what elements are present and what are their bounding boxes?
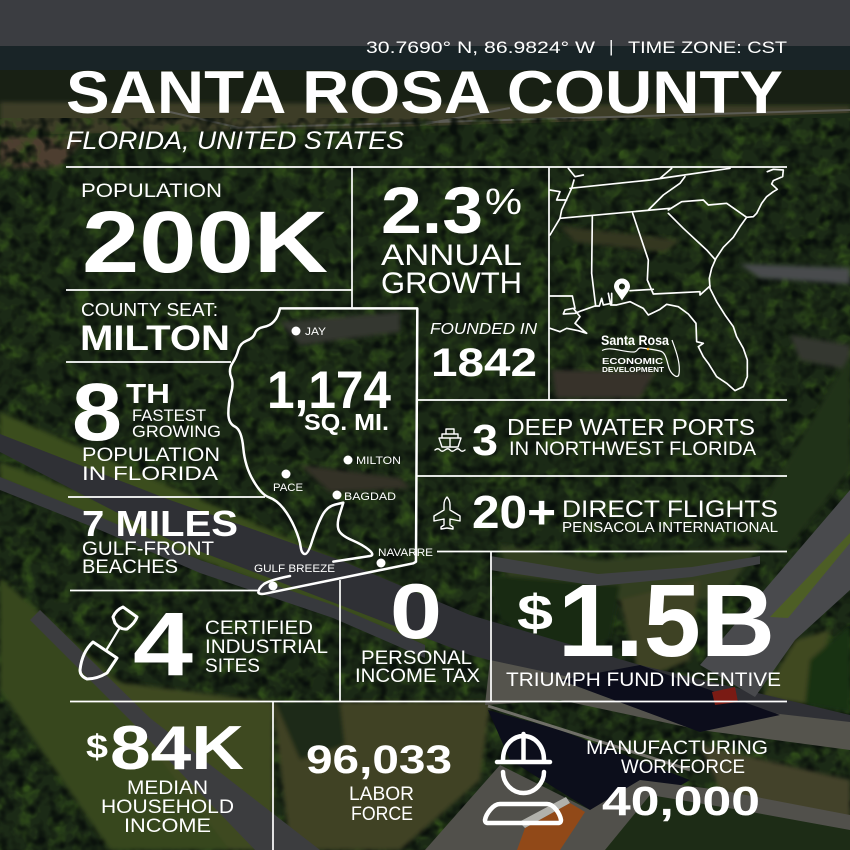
founded stat: 1842 (431, 341, 537, 385)
icon: ship (435, 429, 465, 451)
manufacturing workforce stat: WORKFORCE (621, 757, 745, 778)
clearings (280, 312, 400, 345)
founded stat: FOUNDED IN (430, 321, 537, 338)
clearing at left (0, 136, 85, 168)
lower-left road (30, 610, 320, 850)
county outline (228, 308, 417, 594)
income tax stat: PERSONAL (361, 648, 472, 669)
city markers: NAVARRE (378, 547, 433, 559)
median income stat: HOUSEHOLD (101, 797, 234, 818)
county seat: MILTON (80, 319, 230, 358)
sky and horizon (0, 0, 850, 46)
Santa Rosa logo (601, 332, 679, 376)
underpass shadow (560, 665, 780, 732)
side ramp (490, 556, 760, 586)
population stat: 200K (82, 194, 328, 291)
beaches stat (82, 503, 238, 578)
Santa Rosa logo: ECONOMIC (602, 356, 663, 366)
ports stat: IN NORTHWEST FLORIDA (509, 439, 756, 460)
overpass deck (485, 660, 850, 750)
city markers: MILTON (356, 455, 401, 467)
county seat: COUNTY SEAT: (81, 300, 218, 320)
subtitle: FLORIDA, UNITED STATES (66, 127, 404, 155)
beaches stat: BEACHES (82, 557, 178, 578)
beaches stat: GULF-FRONT (82, 539, 214, 560)
manufacturing workforce stat: 40,000 (602, 778, 760, 824)
fastest growing stat: GROWING (132, 422, 221, 441)
population stat: POPULATION (81, 181, 222, 202)
annual growth stat: 2.3 (381, 173, 483, 247)
ports stat: DEEP WATER PORTS (507, 414, 755, 440)
manufacturing workforce stat (485, 734, 768, 824)
flights stat: PENSACOLA INTERNATIONAL (562, 519, 778, 536)
icon: shovel (80, 607, 137, 679)
county seat (80, 300, 230, 358)
triumph fund stat: $ (517, 585, 553, 641)
income tax stat (355, 567, 480, 687)
median income stat: $ (86, 728, 108, 765)
city markers (254, 326, 433, 590)
city markers: GULF BREEZE (254, 563, 335, 575)
left verges (0, 412, 430, 615)
right verges (745, 355, 850, 552)
labor force stat: FORCE (351, 804, 413, 825)
median income stat: MEDIAN (127, 778, 208, 799)
fastest growing stat: 8 (72, 367, 122, 458)
labor force stat: 96,033 (306, 738, 452, 782)
industrial sites stat (80, 595, 328, 695)
coordinates: 30.7690° N, 86.9824° W (366, 38, 595, 57)
header (66, 37, 787, 155)
red truck cab (712, 687, 738, 705)
annual growth stat: GROWTH (381, 267, 522, 300)
annual growth stat: % (485, 181, 522, 222)
annual growth stat (381, 173, 522, 300)
area figure: 1,174 (267, 361, 391, 420)
manufacturing workforce stat: MANUFACTURING (586, 738, 768, 759)
separator: | (609, 37, 613, 56)
flights stat: 20+ (472, 486, 556, 538)
airfield (0, 102, 850, 135)
title: SANTA ROSA COUNTY (66, 59, 783, 126)
Santa Rosa logo: DEVELOPMENT (602, 367, 665, 374)
right road (700, 490, 850, 697)
fastest growing stat: FASTEST (132, 406, 206, 425)
southeast states outline (550, 168, 783, 391)
right median (770, 533, 850, 618)
location pin (614, 278, 630, 300)
industrial sites stat: SITES (205, 656, 260, 677)
income tax stat: INCOME TAX (355, 666, 480, 687)
regional map (550, 168, 783, 391)
founded stat (430, 321, 537, 385)
industrial sites stat: 4 (133, 595, 193, 695)
median income stat (86, 714, 244, 837)
fastest growing stat (72, 367, 221, 485)
main highway (0, 434, 850, 745)
grid lines (66, 167, 787, 850)
flights stat: DIRECT FLIGHTS (562, 496, 778, 523)
industrial sites stat: CERTIFIED (205, 618, 313, 639)
ports stat (435, 414, 756, 465)
median income stat: INCOME (124, 816, 211, 837)
lower road (425, 765, 850, 850)
annual growth stat: ANNUAL (381, 239, 522, 272)
income tax stat: 0 (390, 567, 442, 655)
truck (517, 803, 585, 850)
centre verge (500, 545, 760, 600)
time zone: TIME ZONE: CST (628, 38, 787, 57)
city markers: BAGDAD (344, 491, 396, 503)
county map: SQ. MI. (304, 409, 389, 435)
ports stat: 3 (472, 416, 498, 465)
median income stat: 84K (110, 714, 244, 783)
Santa Rosa logo: Santa Rosa (601, 332, 669, 348)
triumph fund stat: TRIUMPH FUND INCENTIVE (506, 670, 781, 691)
industrial sites stat: INDUSTRIAL (205, 637, 328, 658)
labor force stat (306, 738, 452, 825)
city markers: JAY (305, 326, 327, 338)
city markers: PACE (273, 482, 303, 494)
icon: plane (434, 497, 460, 529)
icon: worker (485, 734, 561, 823)
labor force stat: LABOR (349, 784, 414, 805)
triumph fund stat: 1.5B (558, 563, 775, 678)
fastest growing stat: POPULATION (82, 445, 220, 466)
county map (228, 308, 433, 594)
fastest growing stat: IN FLORIDA (82, 464, 218, 485)
fastest growing stat: TH (126, 378, 170, 409)
flights stat (434, 486, 778, 538)
beaches stat: 7 MILES (82, 503, 238, 544)
